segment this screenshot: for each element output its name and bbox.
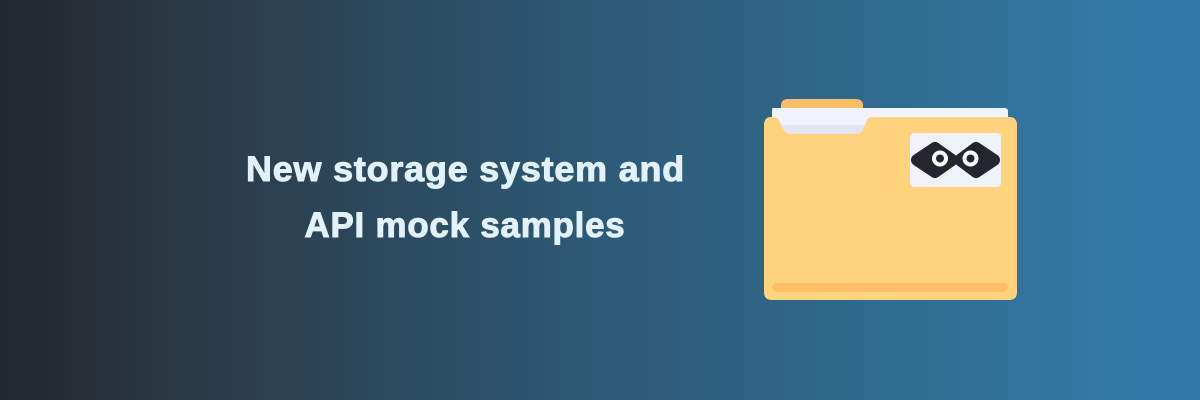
paper sheet (772, 108, 1008, 138)
folder pocket white tab (772, 108, 872, 134)
title text: API mock samples (304, 206, 626, 245)
folder body (764, 117, 1017, 300)
title text: New storage system and (246, 150, 685, 189)
tab shade (781, 125, 865, 134)
folder back tab (781, 99, 863, 112)
logo label (910, 133, 1001, 187)
icon: eyes logo (917, 148, 994, 172)
folder bottom strip (772, 283, 1008, 292)
